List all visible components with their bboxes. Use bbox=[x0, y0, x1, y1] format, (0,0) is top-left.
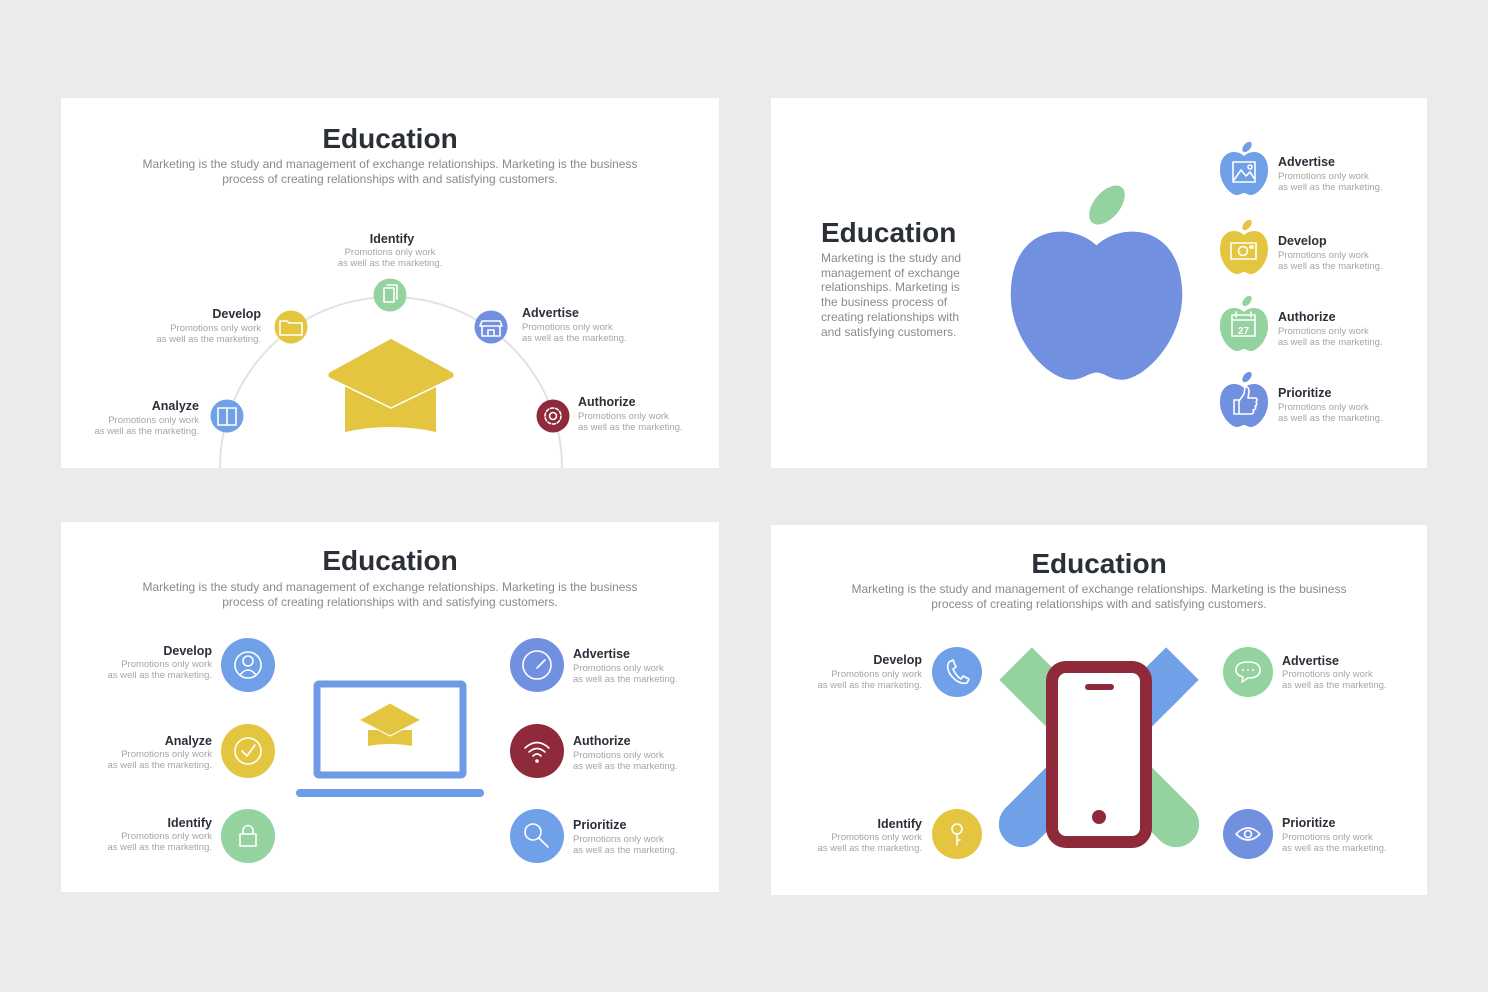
item: Authorize bbox=[510, 724, 678, 778]
item: Develop: Develop bbox=[163, 644, 212, 658]
description bbox=[143, 157, 637, 186]
item: Develop bbox=[107, 638, 275, 692]
item: Advertise: Advertise bbox=[522, 306, 579, 320]
item: Advertise bbox=[1223, 647, 1387, 697]
description: and satisfying customers. bbox=[821, 325, 956, 339]
description: Marketing is the study and management of exchange relationships. Marketing is the business bbox=[143, 580, 637, 594]
item: Authorize: Promotions only work bbox=[578, 411, 669, 422]
item: Prioritize: Promotions only work bbox=[1278, 402, 1369, 413]
item: Develop: as well as the marketing. bbox=[156, 334, 261, 345]
description: management of exchange bbox=[821, 266, 960, 280]
title: Education bbox=[322, 123, 458, 154]
item: Advertise bbox=[1220, 140, 1383, 195]
description: Marketing is the study and management of exchange relationships. Marketing is the business bbox=[143, 157, 637, 171]
title: Education bbox=[1031, 548, 1167, 579]
item: Identify: Promotions only work bbox=[345, 247, 436, 258]
item: Identify: as well as the marketing. bbox=[338, 258, 442, 269]
item: Advertise: Advertise bbox=[1282, 654, 1339, 668]
description: process of creating relationships with and satisfying customers. bbox=[222, 172, 558, 186]
item: Authorize: as well as the marketing. bbox=[573, 761, 678, 772]
item: Authorize: Promotions only work bbox=[573, 750, 664, 761]
item: Develop: as well as the marketing. bbox=[817, 680, 922, 691]
item: Analyze bbox=[107, 724, 275, 778]
item: Prioritize: Prioritize bbox=[1282, 816, 1336, 830]
title: Education bbox=[322, 545, 458, 576]
item: Prioritize bbox=[1220, 370, 1383, 427]
item: Prioritize: Prioritize bbox=[1278, 386, 1332, 400]
item: Prioritize: as well as the marketing. bbox=[573, 845, 678, 856]
description bbox=[852, 582, 1346, 611]
item: Advertise bbox=[474, 306, 627, 344]
item: Develop: as well as the marketing. bbox=[1278, 261, 1383, 272]
item: Authorize: Promotions only work bbox=[1278, 326, 1369, 337]
item: Authorize: Authorize bbox=[1278, 310, 1336, 324]
item: Develop: as well as the marketing. bbox=[107, 670, 212, 681]
item: Authorize: as well as the marketing. bbox=[1278, 337, 1383, 348]
item: Develop: Promotions only work bbox=[1278, 250, 1369, 261]
item: Advertise: Advertise bbox=[573, 647, 630, 661]
description: relationships. Marketing is bbox=[821, 280, 960, 294]
item: Develop: Develop bbox=[1278, 234, 1327, 248]
description: Marketing is the study and bbox=[821, 251, 961, 265]
item: Develop bbox=[817, 647, 982, 697]
item: Analyze: Promotions only work bbox=[121, 749, 212, 760]
description: the business process of bbox=[821, 295, 948, 309]
item: Analyze: as well as the marketing. bbox=[94, 426, 199, 437]
item: Advertise: Advertise bbox=[1278, 155, 1335, 169]
item: Identify bbox=[107, 809, 275, 863]
description bbox=[143, 580, 637, 609]
item: Identify: Promotions only work bbox=[121, 831, 212, 842]
item: Prioritize: Promotions only work bbox=[1282, 832, 1373, 843]
item: Authorize bbox=[536, 395, 683, 433]
icon: crossed bars and phone bbox=[989, 647, 1209, 857]
item: Advertise: Promotions only work bbox=[522, 322, 613, 333]
item: Identify: Identify bbox=[370, 232, 414, 246]
title: Education bbox=[821, 217, 956, 248]
item: Prioritize: Promotions only work bbox=[573, 834, 664, 845]
item: Advertise: as well as the marketing. bbox=[522, 333, 627, 344]
item: Prioritize: as well as the marketing. bbox=[1282, 843, 1387, 854]
item: Develop: Promotions only work bbox=[170, 323, 261, 334]
panel: arc diagram bbox=[61, 98, 719, 468]
item: Identify bbox=[817, 809, 982, 859]
description: process of creating relationships with and satisfying customers. bbox=[222, 595, 558, 609]
item: Authorize: as well as the marketing. bbox=[578, 422, 683, 433]
item: Identify: Identify bbox=[878, 817, 922, 831]
item: Analyze: as well as the marketing. bbox=[107, 760, 212, 771]
item: Prioritize: as well as the marketing. bbox=[1278, 413, 1383, 424]
item: Identify: as well as the marketing. bbox=[107, 842, 212, 853]
item: Advertise: Promotions only work bbox=[1282, 669, 1373, 680]
panel: apple bbox=[771, 98, 1427, 468]
item: Prioritize: Prioritize bbox=[573, 818, 627, 832]
item: Identify: as well as the marketing. bbox=[817, 843, 922, 854]
item: Develop bbox=[1220, 218, 1383, 274]
description: creating relationships with bbox=[821, 310, 959, 324]
icon: laptop bbox=[296, 684, 484, 797]
item: Develop: Develop bbox=[212, 307, 261, 321]
item: Identify: Identify bbox=[168, 816, 212, 830]
item: Identify bbox=[338, 232, 442, 312]
item: Advertise: Promotions only work bbox=[1278, 171, 1369, 182]
item: Prioritize bbox=[510, 809, 678, 863]
description bbox=[821, 251, 961, 339]
description: process of creating relationships with and satisfying customers. bbox=[931, 597, 1267, 611]
item: Authorize bbox=[1220, 294, 1383, 351]
icon: big apple bbox=[1011, 179, 1182, 380]
item: Analyze: Analyze bbox=[165, 734, 212, 748]
item: Authorize: Authorize bbox=[573, 734, 631, 748]
item: Advertise: as well as the marketing. bbox=[1278, 182, 1383, 193]
item: Develop: Promotions only work bbox=[831, 669, 922, 680]
item: Analyze: Analyze bbox=[152, 399, 199, 413]
item: Advertise bbox=[510, 638, 678, 692]
item: Authorize: Authorize bbox=[578, 395, 636, 409]
item: Identify: Promotions only work bbox=[831, 832, 922, 843]
item: Authorize: 27 bbox=[1238, 326, 1249, 337]
item: Develop: Develop bbox=[873, 653, 922, 667]
icon: mortarboard bbox=[328, 338, 454, 432]
item: Prioritize bbox=[1223, 809, 1387, 859]
panel: phone bbox=[771, 525, 1427, 895]
item: Analyze: Promotions only work bbox=[108, 415, 199, 426]
item: Advertise: Promotions only work bbox=[573, 663, 664, 674]
item: Analyze bbox=[94, 399, 244, 437]
item: Advertise: as well as the marketing. bbox=[1282, 680, 1387, 691]
description: Marketing is the study and management of exchange relationships. Marketing is the business bbox=[852, 582, 1346, 596]
item: Advertise: as well as the marketing. bbox=[573, 674, 678, 685]
panel: laptop bbox=[61, 522, 719, 892]
item: Develop: Promotions only work bbox=[121, 659, 212, 670]
item: Develop bbox=[156, 307, 308, 345]
